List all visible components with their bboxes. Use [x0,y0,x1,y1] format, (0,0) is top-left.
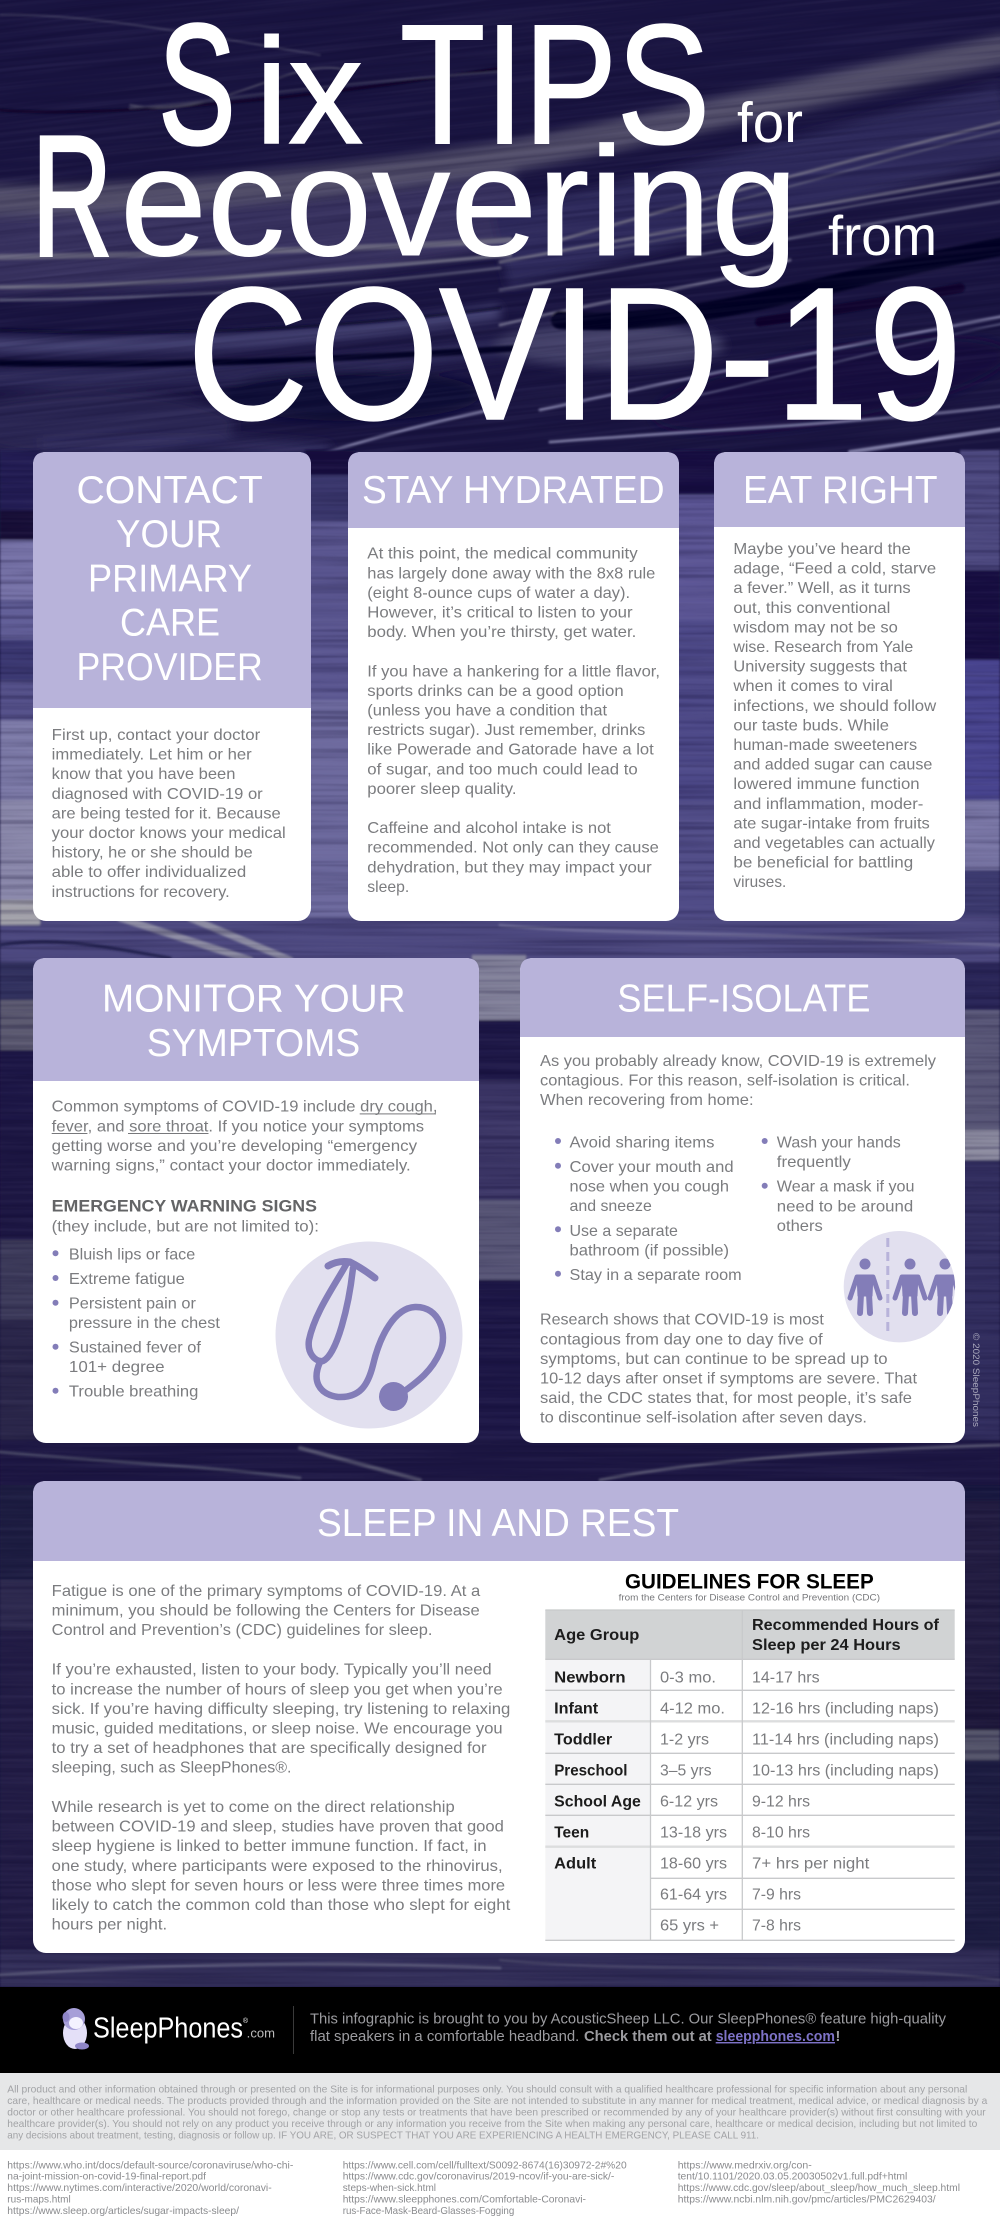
table hours: 14-17 hrs [752,1670,820,1687]
body text: eat right: ate sugar-intake from fruits [733,815,930,832]
body text: sleep: Fatigue is one of the primary symptoms of COVID-19. At a [52,1583,480,1600]
disclaimer: All product and other information obtained through or presented on the Site is for informational purposes only. You should consult with a qualified healthcare professional for specific information about any personal [7,2084,967,2096]
bullet list: home recovery left column [555,1134,742,1284]
body text: eat right: wise. Research from Yale [732,639,913,656]
table column headers [554,1617,940,1654]
body text: sleep: sleep hygiene is linked to better immune function. If fact, in [52,1838,487,1855]
body text: stay hydrated: of sugar, and too much could lead to [367,761,638,778]
table column headers: Sleep per 24 Hours [752,1637,901,1654]
bullet list: emergency warning signs: Persistent pain or [69,1295,197,1312]
body text: eat right: a fever.” Well, as it turns [733,580,911,597]
icon: stethoscope [276,1242,462,1428]
sources column 1: na-joint-mission-on-covid-19-final-report.pdf [7,2171,206,2183]
logo: sleepphones wordmark: ® [243,2017,249,2025]
disclaimer: doctor or other healthcare professional. You should not forego, change or stop any tests or treatments that have been prescribed or recommended by any of your healthcare provider(s) without first consulting with your [7,2107,986,2119]
table hours [752,1670,939,1935]
table ages: 61-64 yrs [660,1887,727,1904]
body text: sleep: between COVID-19 and sleep, studies have proven that good [52,1819,504,1836]
table row labels: Toddler [554,1732,612,1749]
table ages: 65 yrs + [660,1918,719,1935]
body text: contact [52,727,286,901]
logo: sleepphones sheep [62,2008,89,2050]
sources column 2: rus-Face-Mask-Beard-Glasses-Fogging [343,2205,514,2217]
body text: eat right: viruses. [733,874,786,891]
body text: self-isolate research: Research shows that COVID-19 is most [540,1312,824,1329]
copyright note: © 2020 SleepPhones [971,1333,981,1428]
body text: contact: immediately. Let him or her [52,747,252,764]
heading: contact your primary care provider: PROVIDER [76,646,263,689]
table hours: 8-10 hrs [752,1825,810,1842]
heading: contact your primary care provider: CARE [120,602,220,645]
heading: monitor your symptoms: SYMPTOMS [147,1022,360,1065]
bullet list: home recovery right column: frequently [777,1154,851,1171]
table heading: guidelines for sleep: GUIDELINES FOR SLEEP [625,1571,874,1594]
body text: eat right: infections, we should follow [733,698,937,715]
sources column 1: https://www.who.int/docs/default-source/coronaviruse/who-chi- [7,2159,294,2171]
body text: self-isolate intro: As you probably already know, COVID-19 is extremely [540,1053,936,1070]
table hours: 7+ hrs per night [752,1856,870,1873]
body text: self-isolate research [540,1312,918,1427]
table ages: 18-60 yrs [660,1856,727,1873]
sources column 3: https://www.cdc.gov/sleep/about_sleep/how_much_sleep.html [678,2182,960,2194]
body text: common symptoms: warning signs,” contact your doctor immediately. [51,1158,411,1174]
body text: sleep: music, guided meditations, or sleep noise. We encourage you [52,1720,503,1738]
title: from [828,204,937,267]
body text: self-isolate research: said, the CDC states that, for most people, it’s safe [540,1390,912,1407]
body text: eat right: and added sugar can cause [733,757,933,774]
table ages: 3–5 yrs [660,1763,712,1780]
body text: self-isolate intro: When recovering from home: [540,1092,754,1109]
body text: contact: history, he or she should be [52,845,253,862]
sources column 3: https://www.ncbi.nlm.nih.gov/pmc/articles/PMC2629403/ [678,2194,936,2206]
table heading: guidelines for sleep: from the Centers for Disease Control and Prevention (CDC) [619,1593,880,1604]
heading: contact your primary care provider [76,469,263,689]
disclaimer: any decisions about treatment, testing, diagnosis or follow up. IF YOU ARE, OR SUSPECT THAT YOU ARE EXPERIENCING A HEALTH EMERGENCY, PLEASE CALL 911. [7,2129,759,2141]
logo: sleepphones wordmark: SleepPhones [93,2012,243,2044]
body text: eat right: and inflammation, moder- [733,796,923,813]
body text: self-isolate research: to discontinue self-isolation after seven days. [540,1410,867,1427]
body text: stay hydrated: Caffeine and alcohol intake is not [367,820,611,837]
bullet list: home recovery left column: nose when you cough [570,1179,729,1196]
table ages: 4-12 mo. [660,1701,725,1718]
body text: contact: instructions for recovery. [52,884,230,901]
body text: sleep: to try a set of headphones that are specifically designed for [52,1740,487,1757]
title: R [32,101,112,292]
bullet list: home recovery left column: Avoid sharing items [570,1134,714,1151]
heading: contact your primary care provider: YOUR [116,513,222,556]
body text: stay hydrated: has largely done away with the 8x8 rule [367,565,655,582]
body text: stay hydrated [367,546,660,896]
sources column 1 [7,2159,294,2217]
footer message: Check them out at [584,2029,712,2045]
body text: sleep: If you’re exhausted, listen to your body. Typically you’ll need [52,1662,492,1679]
table row labels: School Age [554,1794,641,1811]
bullet list: home recovery right column: Wear a mask if you [777,1179,914,1196]
bullet list: home recovery left column: and sneeze [570,1198,652,1215]
title: ecovering [120,115,798,288]
table row labels: Adult [554,1856,596,1873]
sources column 2: https://www.cell.com/cell/fulltext/S0092-8674(16)30972-2#%20 [343,2159,627,2171]
body text: stay hydrated: recommended. Not only can they cause [367,840,659,857]
heading: eat right: EAT RIGHT [743,469,938,512]
footer message: sleepphones.com [716,2029,835,2045]
body text: common symptoms: fever, and sore throat. If you notice your symptoms [52,1118,424,1135]
table ages: 0-3 mo. [660,1670,716,1687]
sources column 3: tent/10.1101/2020.03.05.20030502v1.full.pdf+html [678,2171,907,2183]
panel: self-isolate [520,958,965,1443]
bullet list: emergency warning signs [52,1246,220,1400]
body text: sleep: sick. If you’re having difficulty sleeping, try listening to relaxing [52,1701,510,1718]
table hours: 12-16 hrs (including naps) [752,1701,939,1718]
sources column 3: https://www.medrxiv.org/con- [678,2159,812,2171]
body text: common symptoms: Common symptoms of COVID-19 include dry cough, [52,1099,437,1116]
body text: eat right: our taste buds. While [733,717,889,734]
bullet list: emergency warning signs: Bluish lips or face [69,1246,195,1263]
heading: sleep in and rest: SLEEP IN AND REST [317,1502,679,1545]
body text: sleep: one study, where participants were exposed to the rhinovirus, [52,1858,503,1875]
bullet list: home recovery right column: others [777,1218,823,1235]
heading: contact your primary care provider: PRIMARY [88,558,252,601]
body text: contact: your doctor knows your medical [52,825,286,842]
table ages: 13-18 yrs [660,1825,727,1842]
table row labels [554,1670,641,1873]
body text: eat right: and vegetables can actually [733,835,935,852]
panel: stay hydrated [348,452,679,921]
sources column 2: https://www.cdc.gov/coronavirus/2019-ncov/if-you-are-sick/- [343,2171,615,2183]
sources column 1: https://www.nytimes.com/interactive/2020/world/coronavi- [7,2182,272,2194]
table hours: 7-9 hrs [752,1887,801,1904]
footer message: ! [836,2029,840,2045]
body text: sleep: those who slept for seven hours or less were three times more [52,1877,505,1894]
body text: common symptoms: getting worse and you’re developing “emergency [52,1138,417,1155]
heading: contact your primary care provider: CONTACT [76,469,263,512]
body text: common symptoms [51,1099,437,1174]
body text: stay hydrated: However, it’s critical to listen to your [367,604,633,622]
bullet list: home recovery right column: Wash your hands [777,1134,901,1151]
heading: stay hydrated: STAY HYDRATED [362,469,664,512]
disclaimer [0,2073,1000,2150]
body text: sleep: sleeping, such as SleepPhones®. [52,1760,292,1777]
panel: sleep in and rest [33,1481,965,1953]
body text: sleep: hours per night. [52,1917,167,1934]
bullet list: emergency warning signs: pressure in the chest [69,1315,220,1332]
bullet list: emergency warning signs: Extreme fatigue [69,1271,185,1288]
body text: sleep: to increase the number of hours of sleep you get when you’re [52,1681,503,1698]
table column headers: Age Group [554,1627,639,1644]
title [32,0,962,460]
subheading: emergency warning signs: (they include, but are not limited to): [52,1219,319,1236]
body text: self-isolate research: contagious from day one to day five of [540,1331,823,1348]
body text: stay hydrated: (eight 8-ounce cups of water a day). [367,585,630,602]
body text: stay hydrated: (unless you have a condition that [367,702,608,720]
body text: eat right [732,541,937,891]
bullet list: home recovery left column: Stay in a separate room [570,1267,742,1284]
table row labels: Preschool [554,1763,628,1780]
sources column 1: https://www.sleep.org/articles/sugar-impacts-sleep/ [7,2205,239,2217]
bullet list: home recovery right column: need to be around [777,1198,913,1215]
table hours: 7-8 hrs [752,1918,801,1935]
subheading: emergency warning signs [52,1197,319,1236]
body text: contact: able to offer individualized [52,864,246,881]
table row labels: Newborn [554,1670,626,1687]
sources column 2: https://www.sleepphones.com/Comfortable-Coronavi- [343,2194,586,2206]
body text: contact: are being tested for it. Because [52,805,281,822]
body text: eat right: human-made sweeteners [733,737,917,754]
table row labels: Infant [554,1701,598,1718]
footer message [310,2011,947,2045]
table ages [660,1670,727,1935]
footer message: flat speakers in a comfortable headband. [310,2029,579,2045]
bullet list: home recovery right column [762,1134,914,1235]
body text: eat right: be beneficial for battling [733,855,913,872]
panel: monitor your symptoms [33,958,479,1443]
body text: eat right: wisdom may not be so [732,619,898,636]
table heading: guidelines for sleep [619,1571,880,1604]
heading: monitor your symptoms [102,978,406,1065]
body text: eat right: out, this conventional [733,600,890,617]
footer band [0,1987,1000,2073]
table: recommended hours of sleep [545,1610,955,1940]
bullet list: emergency warning signs: Sustained fever of [69,1339,201,1356]
heading: monitor your symptoms: MONITOR YOUR [102,978,406,1021]
sources [0,2150,1000,2224]
body text: stay hydrated: poorer sleep quality. [367,781,516,798]
body text: stay hydrated: If you have a hankering for a little flavor, [367,663,660,680]
body text: contact: First up, contact your doctor [52,727,261,744]
body text: stay hydrated: sports drinks can be a good option [367,683,624,700]
body text: sleep: likely to catch the common cold than those who slept for eight [52,1897,511,1914]
bullet list: emergency warning signs: 101+ degree [69,1359,165,1376]
body text: self-isolate intro [540,1053,936,1109]
disclaimer: care, healthcare or medical needs. The products provided through and the information provided on the Site are not intended to substitute in any manner for medical treatment, medical advice, or medical diagnosis by a [7,2095,987,2107]
sources column 2 [343,2159,627,2217]
body text: eat right: when it comes to viral [732,678,893,695]
icon: people separated by distance [844,1231,960,1342]
bullet list: home recovery left column: Use a separate [570,1223,678,1240]
table hours: 11-14 hrs (including naps) [752,1732,939,1749]
body text: stay hydrated: like Powerade and Gatorade have a lot [367,742,654,759]
body text: sleep [52,1583,511,1934]
body text: self-isolate research: 10-12 days after onset if symptoms are severe. That [540,1370,918,1388]
body text: contact: diagnosed with COVID-19 or [52,786,263,803]
body text: self-isolate intro: contagious. For this reason, self-isolation is critical. [540,1073,910,1090]
sources column 3 [678,2159,960,2206]
disclaimer: healthcare provider(s). You should not rely on any product you receive through or any information you receive from the Site when making any personal care, healthcare or medical decision, including but not limited to [7,2118,977,2130]
sources column 2: steps-when-sick.html [343,2182,436,2194]
table ages: 6-12 yrs [660,1794,718,1811]
body text: stay hydrated: restricts sugar). Just remember, drinks [367,722,645,739]
body text: sleep: minimum, you should be following the Centers for Disease [52,1603,480,1620]
body text: eat right: University suggests that [733,659,907,676]
body text: sleep: Control and Prevention’s (CDC) guidelines for sleep. [52,1622,432,1639]
bullet list: home recovery left column: Cover your mouth and [570,1159,734,1176]
body text: stay hydrated: dehydration, but they may impact your [367,859,652,876]
title: ix [255,7,363,175]
subheading: emergency warning signs: EMERGENCY WARNING SIGNS [52,1197,317,1216]
body text: contact: know that you have been [52,766,235,783]
panel: eat right [714,452,965,921]
table hours: 10-13 hrs (including naps) [752,1763,939,1780]
body text: stay hydrated: sleep. [367,879,409,896]
footer message: This infographic is brought to you by AcousticSheep LLC. Our SleepPhones® feature high-quality [310,2011,947,2027]
bullet list: home recovery left column: bathroom (if possible) [570,1243,729,1260]
sources column 1: rus-maps.html [7,2194,71,2206]
table row labels: Teen [554,1825,589,1842]
logo: sleepphones wordmark: .com [247,2025,275,2040]
table column headers: Recommended Hours of [752,1617,940,1634]
table ages: 1-2 yrs [660,1732,709,1749]
body text: sleep: While research is yet to come on the direct relationship [52,1799,455,1816]
body text: eat right: lowered immune function [733,776,920,793]
body text: stay hydrated: body. When you’re thirsty, get water. [367,624,636,641]
heading: self-isolate: SELF-ISOLATE [617,978,870,1021]
table hours: 9-12 hrs [752,1794,810,1811]
panel: contact your primary care provider [33,452,311,921]
body text: self-isolate research: symptoms, but can continue to be spread up to [540,1351,888,1368]
title: for [737,91,803,155]
bullet list: emergency warning signs: Trouble breathing [69,1383,198,1400]
body text: eat right: Maybe you’ve heard the [733,541,911,558]
body text: eat right: adage, “Feed a cold, starve [733,561,936,578]
body text: stay hydrated: At this point, the medical community [367,546,638,563]
